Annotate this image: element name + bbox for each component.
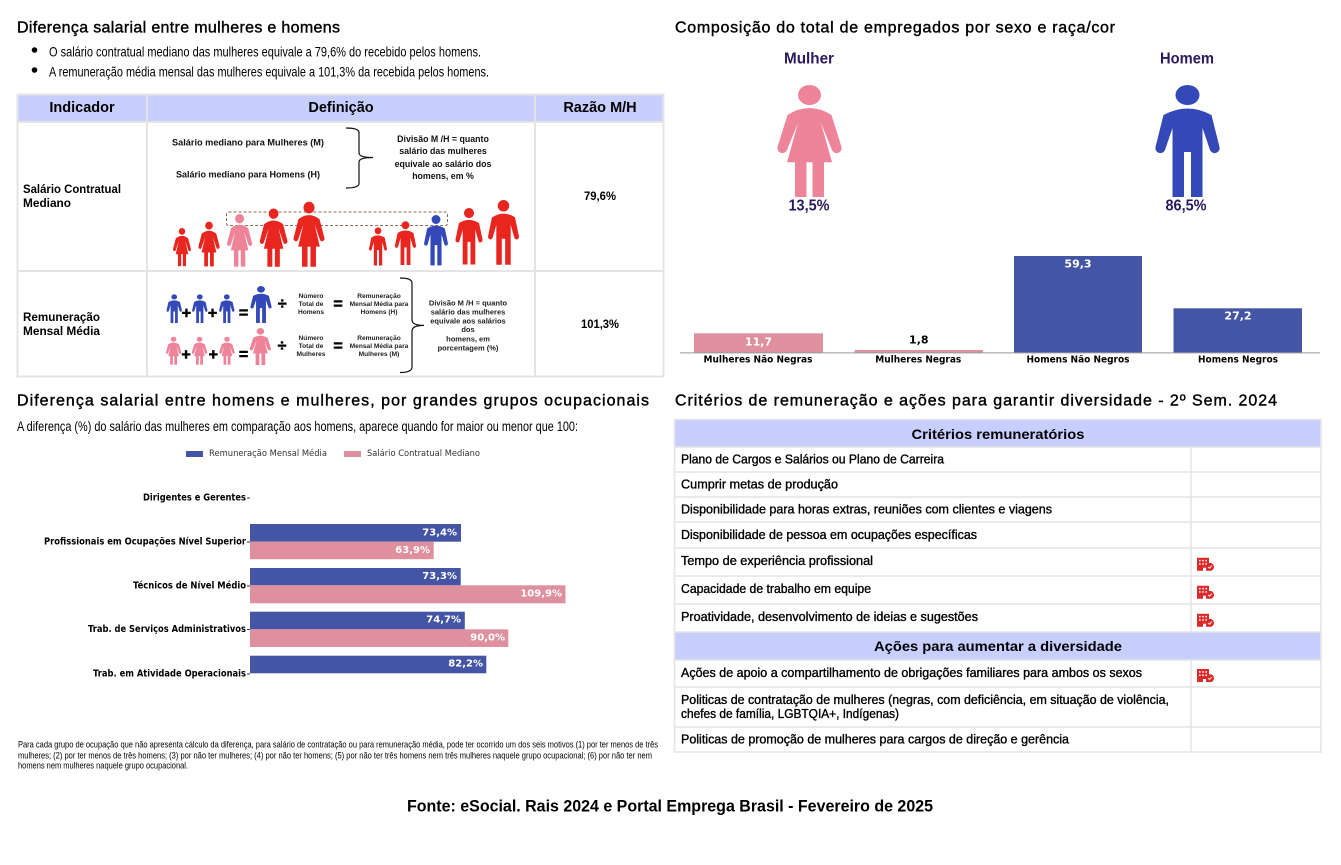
definition text: salário mediano: homens, em % [412,171,474,181]
icon stat: homem: Homem [1160,50,1214,68]
definition text: salário mediano: equivale ao salário dos [395,159,492,169]
table header: Indicador [49,100,115,116]
icon: empresa verificada [1197,614,1214,627]
icon equation: mulheres: = [333,338,343,355]
icon equation: homens: Remuneração [357,293,401,300]
table header: Razão M/H [563,100,637,116]
icon stat: homem [1155,50,1220,214]
bar chart: composição por sexo e raça/cor: Homens Não Negros [1026,354,1130,366]
icon stat: mulher: 13,5% [788,198,830,214]
title: grupos ocupacionais: Diferença salarial entre homens e mulheres, por grandes grupos ocupacionais [17,392,649,410]
section heading: critérios remuneratórios: Critérios remuneratórios [912,426,1085,442]
icon equation: mulheres: Mulheres [297,351,326,358]
panel: critérios table [674,420,1321,752]
title: critérios: Critérios de remuneração e ações para garantir diversidade - 2º Sem. 2024 [675,392,1277,410]
criteria rows [681,452,1052,624]
icon equation: homens: = [239,305,248,322]
row label: salário contratual mediano: Salário Contratual [23,182,121,196]
icon equation: mulheres: Mulheres (M) [359,351,399,358]
bar chart: grupos ocupacionais [44,492,566,680]
bar chart: composição por sexo e raça/cor: 11,7 [745,336,772,348]
row label: remuneração mensal média: Mensal Média [23,324,100,338]
footnote: Para cada grupo de ocupação que não apresenta cálculo da diferença, para salário de contratação ou para remuneração média, pode ter ocorrido um dos seis motivos (1) por ter menos de três [18,740,658,750]
icon equation: homens: Homens (H) [360,309,398,316]
icon equation: homens: ÷ [278,296,287,313]
bar chart: composição por sexo e raça/cor: Mulheres Não Negras [704,354,813,366]
bullet list: key findings: A remuneração média mensal das mulheres equivale a 101,3% da recebida pelos homens. [49,64,489,80]
row label: salário contratual mediano [23,182,121,210]
bar chart: grupos ocupacionais: Dirigentes e Gerentes [143,492,246,504]
definition text: salário mediano [172,128,492,188]
definition text: divisão M/H: dos [461,325,475,334]
criteria rows: Plano de Cargos e Salários ou Plano de Carreira [681,452,944,466]
bar chart: grupos ocupacionais: Trab. de Serviços Administrativos [88,624,246,635]
definition text: divisão M/H: equivale aos salários [430,316,506,326]
action rows: Politicas de contratação de mulheres (negras, com deficiência, em situação de violência, [681,693,1169,707]
definition text: salário mediano: Salário mediano para Mulheres (M) [172,138,324,148]
criteria rows: Proatividade, desenvolvimento de ideias e sugestões [681,610,978,624]
icon equation: mulheres: + [181,346,191,364]
bullet list: key findings [32,44,489,80]
legend: Salário Contratual Mediano [367,449,480,459]
icon: empresa verificada [1197,558,1214,571]
bar chart: grupos ocupacionais: 73,4% [422,528,457,538]
icon stat: mulher: Mulher [784,50,834,68]
legend [186,448,480,459]
row label: salário contratual mediano: Mediano [23,196,71,210]
bar chart: grupos ocupacionais: 73,3% [422,571,457,582]
definition text: divisão M/H: porcentagem (%) [438,344,499,352]
icon equation: mulheres: ÷ [278,338,287,355]
icon stat: mulher [777,50,842,214]
definition text: divisão M/H: Divisão M /H = quanto [429,298,507,307]
bar chart: composição por sexo e raça/cor: Homens Negros [1198,354,1278,366]
footnote: homens nem mulheres naquele grupo ocupacional. [18,760,188,772]
icon equation: mulheres: + [209,346,218,364]
bar chart: grupos ocupacionais: Trab. em Atividade Operacionais [93,668,246,680]
subtitle: A diferença (%) do salário das mulheres em comparação aos homens, aparece quando for maior ou menor que 100: [17,418,578,434]
icon equation: homens: = [333,296,343,313]
bar chart: grupos ocupacionais: Profissionais em Ocupações Nível Superior [44,536,246,548]
definition text: divisão M/H: homens, em [446,334,490,343]
icon: empresa verificada [1197,669,1214,682]
action rows: Ações de apoio a compartilhamento de obrigações familiares para ambos os sexos [681,666,1142,680]
icon equation: homens: Número [299,293,323,300]
legend: Remuneração Mensal Média [209,448,327,459]
footnote [18,740,658,772]
icon: empresa verificada [1197,586,1214,599]
criteria rows: Tempo de experiência profissional [681,554,873,568]
bar chart: grupos ocupacionais: Técnicos de Nível Médio [133,580,246,592]
action rows: chefes de família, LGBTQIA+, Indígenas) [681,707,899,721]
action rows: Politicas de promoção de mulheres para cargos de direção e gerência [681,732,1069,746]
criteria rows: Disponibilidade para horas extras, reuniões com clientes e viagens [681,502,1052,516]
bar chart: composição por sexo e raça/cor [680,256,1320,366]
source line: Fonte: eSocial. Rais 2024 e Portal Emprega Brasil - Fevereiro de 2025 [407,796,933,816]
criteria rows: Disponibilidade de pessoa em ocupações específicas [681,528,977,542]
icon equation: homens: + [182,305,191,322]
icon equation: homens [166,286,409,323]
icon equation: homens: Total de [299,301,324,308]
row label: remuneração mensal média: Remuneração [23,310,100,324]
title: diferença salarial: Diferença salarial entre mulheres e homens [17,20,340,36]
icon equation: homens: Mensal Média para [350,301,409,308]
definition text: divisão M/H [400,278,507,372]
action rows [681,666,1169,746]
icon stat: homem: 86,5% [1166,198,1206,214]
table header [49,100,637,116]
criteria rows: Capacidade de trabalho em equipe [681,582,871,596]
bar chart: composição por sexo e raça/cor: 1,8 [909,334,929,346]
icon equation: homens: + [208,305,217,322]
icon equation: mulheres: Remuneração [357,335,401,342]
table header: Definição [308,100,374,116]
title: composição: Composição do total de empregados por sexo e raça/cor [675,20,1116,36]
bar chart: composição por sexo e raça/cor: 59,3 [1064,258,1092,270]
bullet list: key findings: O salário contratual mediano das mulheres equivale a 79,6% do recebido pelos homens. [49,44,481,60]
bar chart: composição por sexo e raça/cor: Mulheres Negras [875,354,962,366]
section heading: ações: Ações para aumentar a diversidade [874,638,1122,654]
bar chart: grupos ocupacionais: 82,2% [448,658,483,670]
panel: indicator table [17,94,664,377]
bar chart: grupos ocupacionais: 109,9% [520,588,562,600]
icon row: mediana de salários [173,200,519,267]
icon equation: mulheres: Total de [299,343,324,350]
value: 101,3%: 101,3% [581,317,619,331]
definition text: salário mediano: salário das mulheres [399,146,487,156]
definition text: salário mediano: Salário mediano para Homens (H) [176,170,320,180]
icon equation: mulheres: = [239,346,248,364]
icon equation: mulheres: Número [299,335,323,342]
bar chart: grupos ocupacionais: 74,7% [426,614,461,626]
criteria rows: Cumprir metas de produção [681,478,838,492]
row label: remuneração mensal média [23,310,100,338]
icon equation: mulheres: Mensal Média para [350,343,409,350]
definition text: salário mediano: Divisão M /H = quanto [397,134,489,144]
bar chart: composição por sexo e raça/cor: 27,2 [1224,310,1252,322]
value: 79,6%: 79,6% [584,189,616,203]
icon equation: mulheres [166,328,409,365]
footnote: mulheres; (2) por ter menos de três homens; (3) por não ter mulheres; (4) por não ter homens; (5) por não ter três homens nem três mulheres naquele grupo ocupacional; (6) por não ter nem [18,750,652,762]
bar chart: grupos ocupacionais: 90,0% [470,632,505,644]
bar chart: grupos ocupacionais: 63,9% [395,545,430,556]
definition text: divisão M/H: salário das mulheres [431,307,505,316]
icon equation: homens: Homens [298,309,324,316]
